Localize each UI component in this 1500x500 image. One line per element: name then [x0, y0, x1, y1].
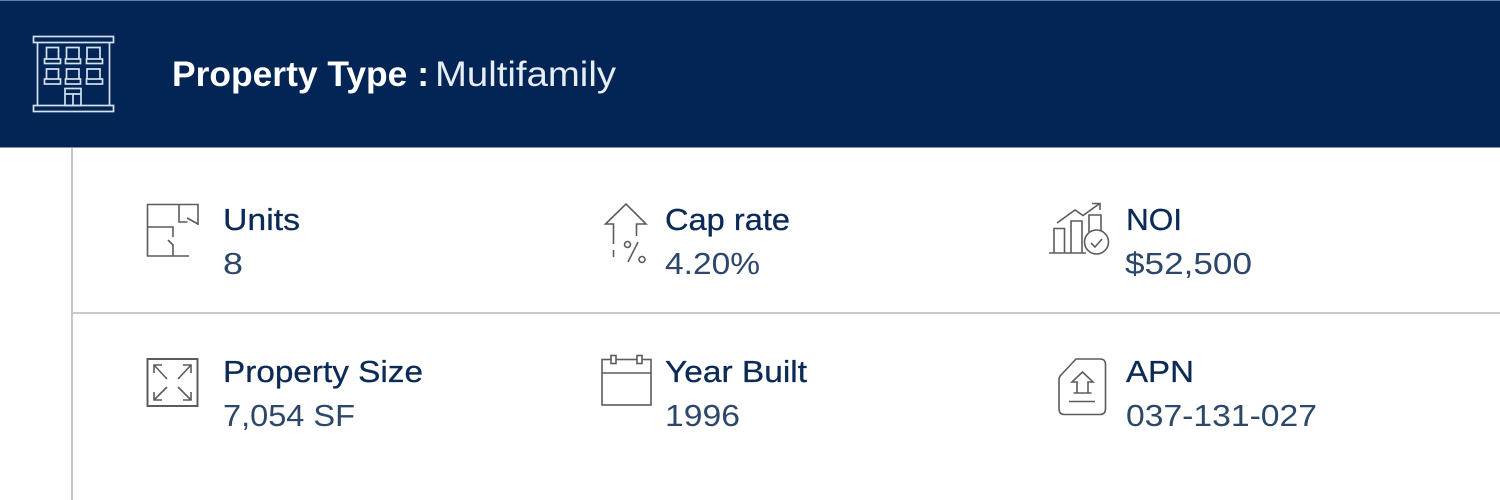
- stat: NOI: [1049, 202, 1252, 281]
- stat: cap rate: [606, 202, 790, 281]
- heading value: multifamily: Multifamily: [435, 55, 617, 94]
- property size value: 7,054 SF: [223, 398, 355, 433]
- header banner: [0, 0, 1500, 148]
- icon: apartment building: [34, 36, 114, 112]
- icon: floor plan: [148, 204, 198, 256]
- property size label: Property Size: [223, 354, 423, 389]
- cap rate value: 4.20%: [665, 246, 760, 281]
- year built value: 1996: [665, 398, 740, 433]
- NOI value: $52,500: [1125, 246, 1252, 281]
- year built label: Year Built: [665, 354, 807, 389]
- icon: bar chart with check: [1049, 204, 1108, 254]
- icon: expand arrows: [148, 359, 198, 406]
- NOI label: NOI: [1126, 202, 1182, 237]
- APN value: 037-131-027: [1126, 398, 1317, 433]
- stat: APN: [1059, 354, 1317, 433]
- icon: parcel card with house: [1059, 359, 1106, 414]
- APN label: APN: [1126, 354, 1194, 389]
- stat: property size: [148, 354, 423, 433]
- icon: arrow up with percent: [606, 204, 646, 262]
- stat: units: [148, 202, 300, 281]
- cap rate label: Cap rate: [665, 202, 790, 237]
- heading: property type: Property Type :: [172, 55, 429, 94]
- units value: 8: [223, 246, 243, 281]
- stat: year built: [602, 354, 807, 433]
- units label: Units: [223, 202, 300, 237]
- icon: calendar: [602, 356, 651, 405]
